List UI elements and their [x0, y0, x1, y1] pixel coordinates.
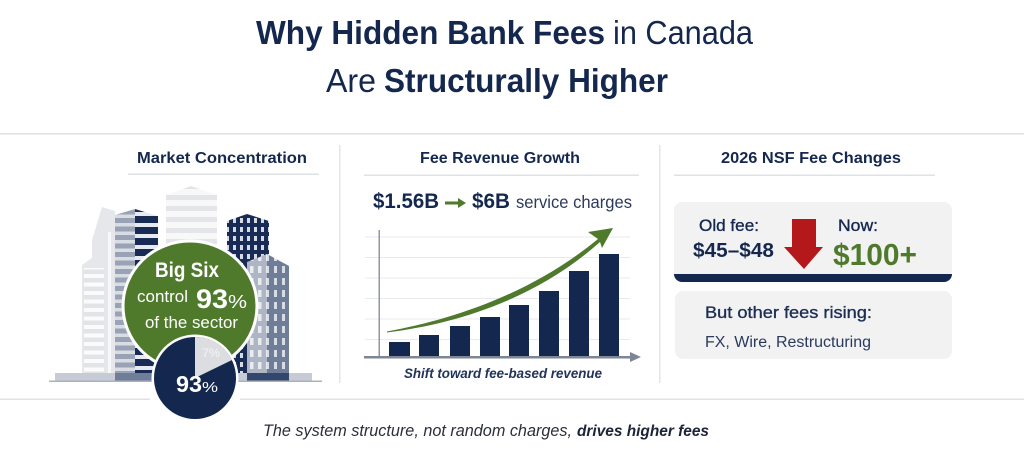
pie chart: 93 percent: % [202, 379, 218, 396]
callout: big six [123, 241, 257, 371]
card: other fees [675, 291, 952, 359]
panel: fee revenue growth [364, 150, 641, 381]
footer caption: The system structure, not random charges, [263, 421, 572, 440]
callout: big six: Big Six [155, 259, 219, 282]
card: fee comparison: Now: [838, 216, 878, 235]
bar chart [364, 230, 641, 362]
pie chart: 93 percent [152, 334, 238, 422]
stat: revenue change [373, 190, 632, 213]
title: Are [326, 62, 376, 99]
card: fee comparison: $100+ [833, 237, 917, 272]
heading: fee revenue growth: Fee Revenue Growth [420, 150, 580, 167]
card: fee comparison [674, 202, 952, 282]
icon: red down arrow [784, 219, 823, 269]
card: other fees: FX, Wire, Restructuring [705, 334, 871, 351]
panel: nsf fee changes [674, 150, 952, 359]
arrow: growth trend [387, 228, 613, 332]
heading: nsf fee changes: 2026 NSF Fee Changes [721, 150, 901, 167]
stat: revenue change: service charges [516, 192, 632, 212]
icon: city skyline [49, 186, 322, 382]
heading: market concentration: Market Concentration [137, 150, 307, 167]
footer caption: drives higher fees [577, 423, 709, 440]
pie chart: 93 percent: 93 [176, 371, 202, 397]
title: Structurally Higher [384, 62, 668, 99]
caption: fee shift: Shift toward fee-based revenue [404, 366, 602, 381]
title: in Canada [613, 14, 754, 51]
callout: big six: % [228, 292, 247, 312]
card: other fees: But other fees rising: [705, 303, 872, 322]
stat: revenue change: $1.56B [373, 190, 439, 213]
callout: big six: control [137, 288, 188, 306]
panel: market concentration [49, 150, 322, 422]
callout: big six: of the sector [145, 313, 238, 332]
card: fee comparison: Old fee: [699, 216, 759, 235]
card: fee comparison: $45–$48 [693, 240, 774, 262]
pie chart: 93 percent: 7% [202, 346, 220, 360]
title: Why Hidden Bank Fees [256, 14, 605, 51]
title [256, 14, 754, 99]
callout: big six: 93 [196, 284, 228, 314]
stat: revenue change: $6B [472, 190, 510, 213]
